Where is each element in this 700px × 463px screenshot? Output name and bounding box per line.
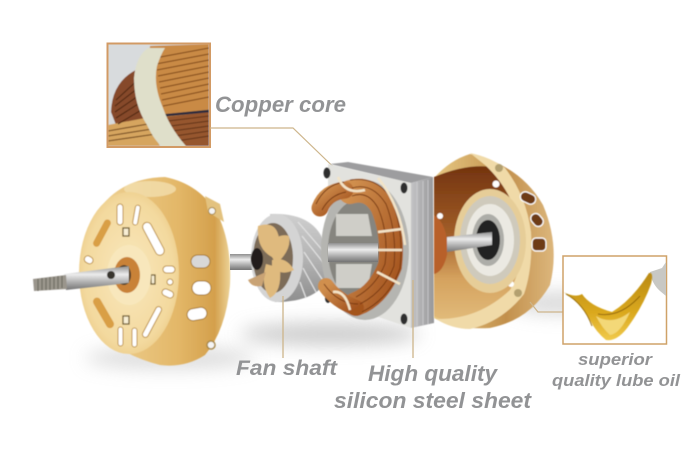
housing outer dome — [434, 154, 554, 328]
housing rim — [436, 153, 531, 329]
panel: copper core inset — [108, 44, 210, 147]
housing vents — [519, 190, 546, 251]
rotor lamination stripes — [298, 222, 326, 298]
label: High quality silicon steel sheet: silicon steel sheet — [334, 388, 533, 413]
label: superior quality lube oil — [552, 350, 681, 390]
small square holes — [123, 228, 155, 324]
ground shadows — [85, 292, 610, 369]
stator bore — [321, 180, 409, 320]
right end housing — [434, 153, 554, 329]
label: superior quality lube oil: superior — [578, 350, 653, 369]
leader line: copper core — [210, 128, 350, 183]
housing dome — [100, 177, 230, 366]
top highlight — [124, 181, 176, 197]
leader line: lube oil — [530, 302, 563, 312]
panel: lube oil inset — [563, 256, 666, 344]
rotor with fan — [248, 214, 329, 302]
leader line: silicon steel sheet — [412, 280, 414, 358]
left end housing — [79, 177, 230, 366]
rotor front rim — [251, 214, 303, 302]
stator front face — [328, 164, 411, 328]
fan blades — [248, 224, 294, 298]
rim bolts — [495, 164, 503, 172]
mounting lugs — [205, 196, 224, 222]
label: High quality silicon steel sheet — [334, 361, 533, 413]
face slots — [83, 204, 175, 347]
housing interior — [434, 166, 527, 322]
corner holes — [324, 168, 408, 324]
bearing housing — [454, 189, 526, 293]
amber openings — [92, 218, 112, 248]
rotor cylinder — [270, 214, 329, 302]
stator side laminations — [411, 177, 434, 328]
shaft: left of fan — [230, 254, 262, 270]
output shaft with thread — [33, 266, 129, 291]
bearing hub — [107, 245, 151, 305]
copper windings — [320, 190, 391, 308]
shaft into bearing — [447, 232, 492, 252]
front face — [79, 192, 179, 354]
label: Fan shaft: Fan shaft — [236, 356, 338, 380]
fan hub — [251, 248, 263, 270]
oil bottle — [650, 262, 666, 296]
inset frame — [108, 44, 210, 147]
winding detail lines — [316, 179, 401, 312]
heading: Copper core: Copper core — [215, 92, 346, 117]
inset photo — [108, 44, 210, 147]
label: High quality silicon steel sheet: High quality — [368, 361, 498, 386]
winding ties — [333, 177, 405, 310]
stator block — [316, 162, 434, 328]
stator top edge — [330, 162, 433, 183]
interior holes — [437, 180, 514, 287]
oil stream — [563, 273, 652, 340]
inset frame — [563, 256, 666, 344]
shaft: through rotor and stator — [328, 243, 378, 262]
side vents — [186, 255, 211, 322]
motor side winding — [434, 215, 447, 274]
fan opening — [253, 223, 293, 293]
leader line: fan shaft — [282, 296, 284, 358]
label: superior quality lube oil: quality lube oil — [552, 371, 681, 390]
